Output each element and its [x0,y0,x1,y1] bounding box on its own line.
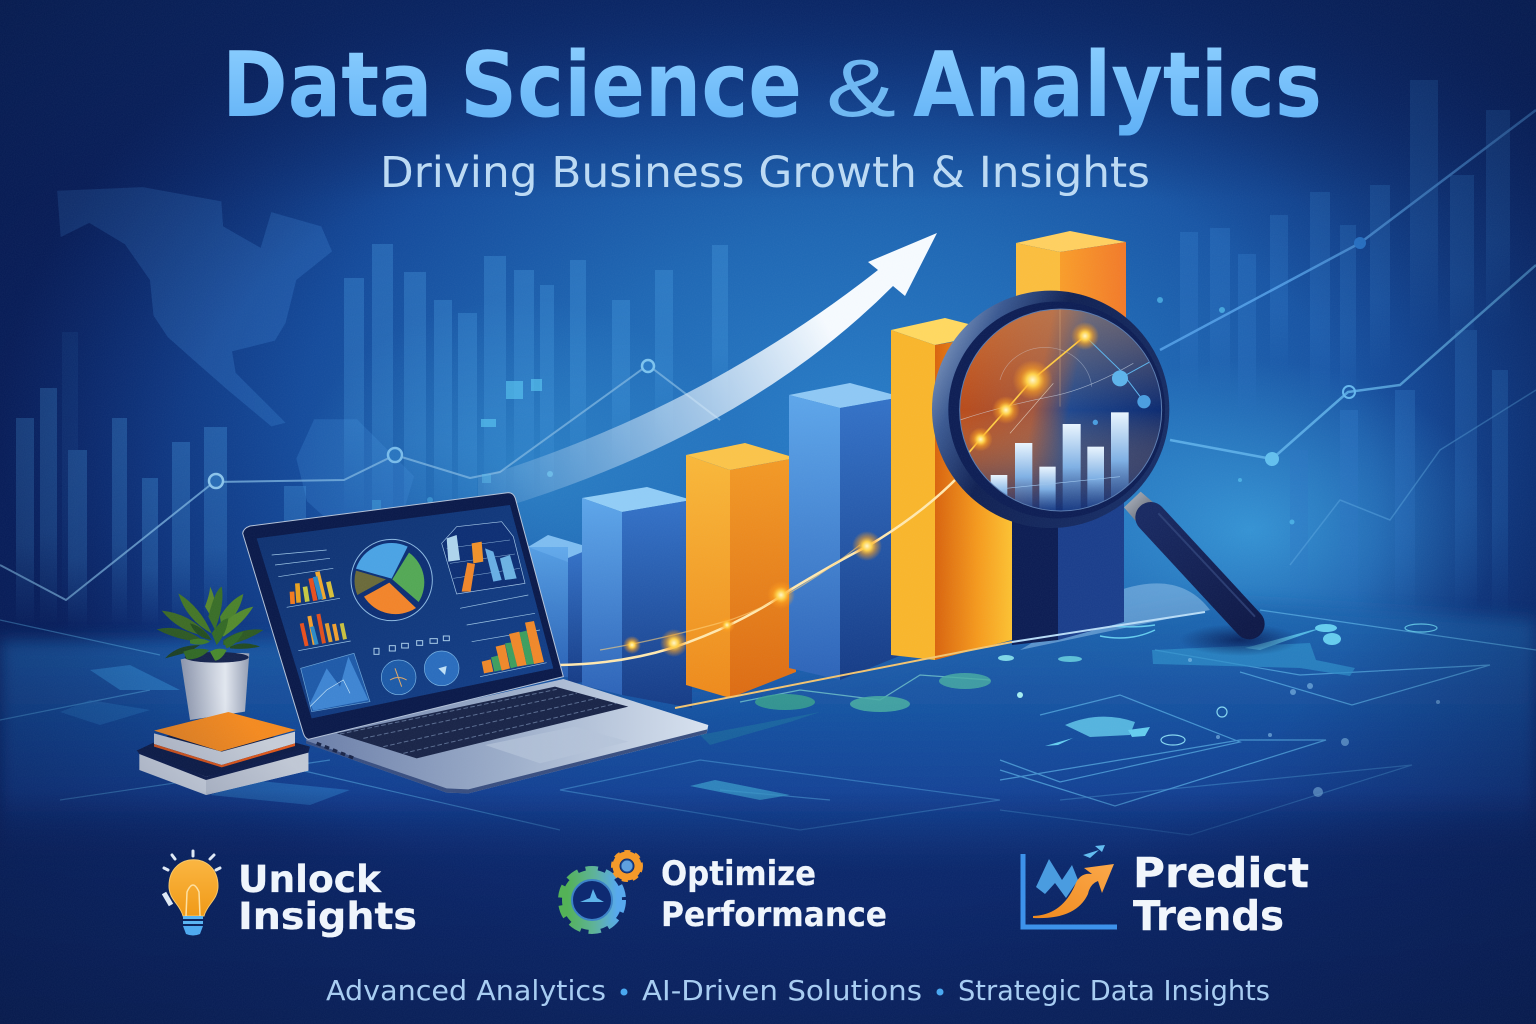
screen: top bars chart [272,550,340,607]
floating data squares [298,297,1294,562]
subtitle: Driving Business Growth & Insights [380,148,1150,198]
3D bar chart [528,231,1126,708]
magnifier handle [1124,492,1255,624]
title: Data Science [222,33,802,138]
screen: bottom-right bars chart [460,595,547,677]
laptop screen [257,505,553,718]
floor edge line [675,612,1205,708]
background bar chart: left [16,244,728,632]
plant [157,587,263,720]
title: & [826,43,896,134]
footer tagline: AI-Driven Solutions [642,974,922,1007]
bar 4: blue tall [789,383,902,680]
screen: top-right panel [442,522,525,594]
screen: area chart [301,653,370,712]
label: Performance [661,895,887,935]
shadow under magnifier [1180,624,1300,656]
label [661,854,887,935]
label: Optimize [661,854,816,894]
feature: predict trends [1023,845,1309,940]
magnifying glass [932,291,1255,624]
icon: light bulb [164,851,220,936]
growth arrow [478,233,937,515]
footer tagline: Strategic Data Insights [958,974,1270,1007]
icon: gears [564,854,639,928]
bar 1: blue small [528,535,592,685]
footer tagline: Advanced Analytics [326,974,606,1007]
pot [181,653,249,720]
bar 2: blue [582,487,692,708]
icon: trend chart [1023,845,1117,927]
magnifier lens content [960,303,1162,512]
laptop lid [243,493,563,739]
label [238,858,417,938]
magnifier ring [932,291,1169,528]
bar 5: yellow [891,318,1012,660]
title: Analytics [913,33,1322,138]
bottom fade for feature row [0,790,1536,1024]
feature: optimize performance [564,854,887,935]
footer tagline [326,974,1270,1007]
title [222,33,1322,138]
label: Insights [238,895,417,938]
laptop base [306,679,708,793]
screen: second bars chart [298,614,351,651]
leaves [157,587,263,661]
floor network nodes [700,655,1082,745]
screen: small labels [374,636,449,654]
label: Unlock [238,858,382,901]
feature: unlock insights [164,851,417,938]
label: Trends [1133,892,1284,940]
label: Predict [1133,849,1309,897]
bar 3: orange [686,443,796,698]
background line charts [0,110,1536,600]
screen: gauge circles [381,651,459,695]
bar 6: orange and navy [1012,231,1126,645]
world map silhouette [57,187,414,533]
glowing trend line [560,480,955,665]
books [137,712,310,795]
floor with perspective data panels [0,583,1536,880]
label [1133,849,1309,940]
laptop [243,493,708,793]
screen: pie chart [351,539,432,621]
background bar chart: right [1180,80,1510,620]
